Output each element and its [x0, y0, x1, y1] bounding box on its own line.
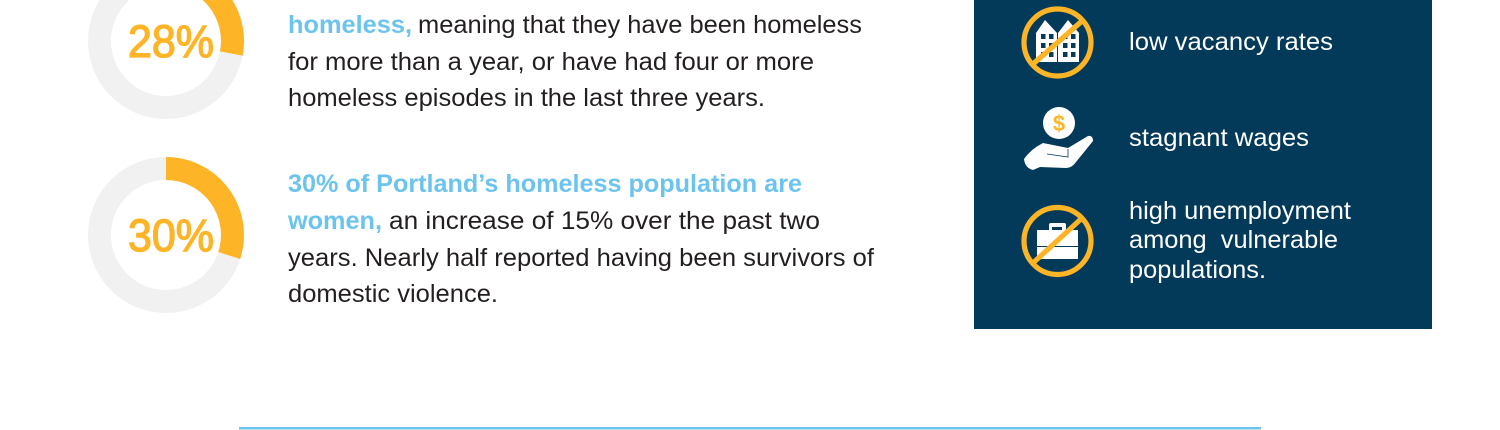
- donut chart: 28%: [100, 0, 232, 108]
- icon: hand holding coin: $: [1053, 111, 1065, 136]
- text block: chronically homeless: homeless,: [288, 11, 412, 39]
- text block: chronically homeless: meaning that they have been homeless: [418, 11, 862, 39]
- icon: no briefcase: [1024, 208, 1091, 274]
- text block: women: domestic violence.: [288, 280, 498, 308]
- label: low vacancy rates: low vacancy rates: [1129, 28, 1333, 56]
- label: high unemployment: high unemployment: [1129, 197, 1351, 225]
- text block: chronically homeless: [288, 11, 862, 112]
- text block: women: women,: [287, 207, 382, 235]
- donut chart: 30%: [100, 168, 232, 302]
- label: high unemployment: among vulnerable: [1129, 226, 1338, 254]
- text block: chronically homeless: for more than a year, or have had four or more: [288, 48, 814, 76]
- text block: women: [287, 170, 874, 308]
- donut chart: 30%: 30%: [128, 210, 214, 261]
- label: stagnant wages: stagnant wages: [1129, 124, 1309, 152]
- icon: hand holding coin: [1024, 107, 1093, 170]
- text block: women: years. Nearly half reported having been survivors of: [288, 244, 874, 272]
- text block: chronically homeless: homeless episodes in the last three years.: [288, 84, 765, 112]
- donut chart: 28%: 28%: [128, 16, 214, 67]
- icon: no buildings: [1024, 9, 1091, 76]
- label: high unemployment: populations.: [1129, 256, 1266, 284]
- text block: women: an increase of 15% over the past two: [389, 207, 820, 235]
- label: high unemployment: [1129, 197, 1351, 284]
- text block: women: 30% of Portland’s homeless population are: [288, 170, 802, 198]
- panel: contributing factors: [974, 0, 1432, 329]
